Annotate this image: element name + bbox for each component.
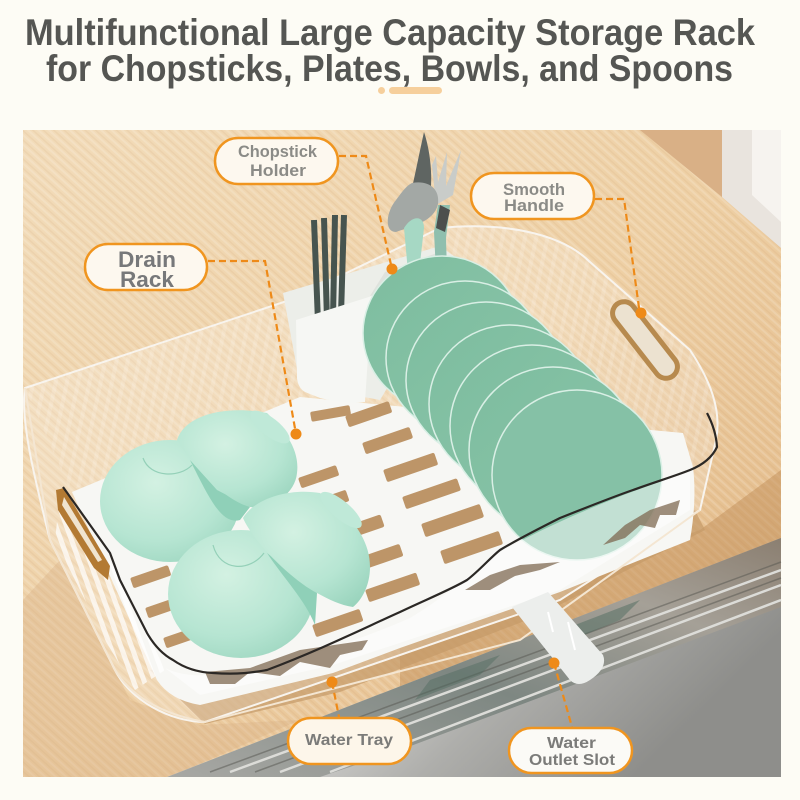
callout: chopstick holder: Holder [250,161,306,180]
background cabinet [640,130,781,248]
green bowls [100,405,370,658]
callout: drain rack: Rack [120,267,175,292]
white drain rack [72,397,694,705]
tray front ribs [165,472,690,695]
transparent tray back wall [24,226,718,722]
chopstick holder front [296,296,372,402]
wood countertop [23,130,781,777]
title [25,12,755,89]
callout: drain rack [85,244,302,440]
title underline accent [378,87,442,94]
photo panel: rack on wooden counter [23,130,781,777]
bowl back right [177,405,297,521]
water outlet spout [512,592,604,684]
spoon and fork [388,132,461,272]
title: for Chopsticks, Plates, Bowls, and Spoons [46,48,733,89]
bowl back left [100,440,240,562]
green plates [363,256,662,560]
drain slots [130,401,503,648]
steel sink [167,538,781,777]
callout: water outlet slot: Outlet Slot [529,752,616,769]
tray front rim [25,388,717,722]
bowl front right [243,486,370,625]
callout: smooth handle [471,173,646,318]
tray back ribs [25,226,718,490]
callout: drain rack: Drain [118,247,176,272]
callout: water tray [288,676,411,764]
callout: chopstick holder: Chopstick [238,142,318,161]
callout: smooth handle: Handle [504,196,564,215]
title: Multifunctional Large Capacity Storage Rack [25,12,755,53]
tray base strip [150,510,705,724]
chopstick holder back and interior [283,246,462,400]
chopsticks [314,215,344,322]
left tray ribs [55,495,165,690]
callout: water tray: Water Tray [305,732,393,749]
handle: left gold cutout [56,488,110,580]
bowl front left [168,530,314,658]
callout: smooth handle: Smooth [503,180,565,199]
handle: right gold cutout [604,294,686,386]
callout: water outlet slot: Water [547,735,596,752]
jagged reflections under rim [205,500,680,684]
callout: water outlet slot [509,658,632,773]
callout: chopstick holder [215,138,398,274]
